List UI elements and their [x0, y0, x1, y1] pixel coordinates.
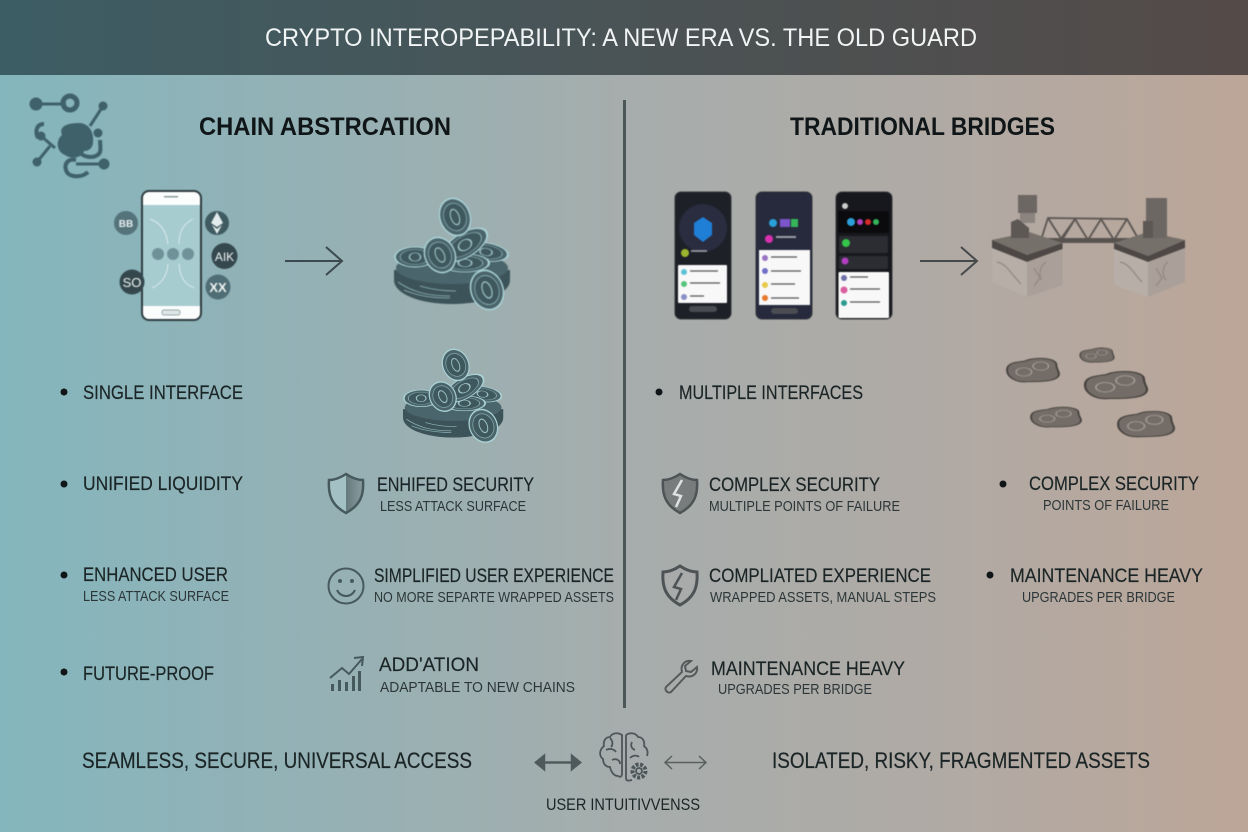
icon: coin stack — [394, 194, 510, 314]
arrow: to unified liquidity — [285, 247, 342, 275]
bullet list: LESS ATTACK SURFACE — [83, 588, 229, 605]
center divider — [623, 100, 626, 708]
icon: phone with chains — [114, 191, 238, 320]
item: complex security: MULTIPLE POINTS OF FAILURE — [709, 498, 900, 515]
benefit: adoption: ADAPTABLE TO NEW CHAINS — [380, 679, 575, 696]
arrow: solid double — [536, 756, 580, 769]
benefit: adoption: ADD'ATION — [379, 654, 479, 676]
title banner: CRYPTO INTEROPEPABILITY: A NEW ERA VS. THE OLD GUARD — [265, 24, 977, 52]
bullet: maintenance heavy — [986, 565, 1203, 606]
benefit: security: ENHIFED SECURITY — [377, 474, 534, 496]
benefit: security — [329, 474, 534, 515]
bullet: complex security — [1000, 473, 1199, 514]
item: maintenance heavy: UPGRADES PER BRIDGE — [718, 681, 872, 698]
icon: phone with chains: BB — [119, 219, 133, 230]
icon: small coin stack — [403, 346, 503, 446]
arrow: open double — [665, 756, 706, 769]
footer text: left: SEAMLESS, SECURE, UNIVERSAL ACCESS — [82, 748, 472, 773]
bullet: maintenance heavy: MAINTENANCE HEAVY — [1010, 565, 1203, 587]
panel: chain abstraction — [30, 96, 614, 696]
icon: phone with chains: SO — [123, 275, 141, 290]
bullet list — [60, 382, 243, 685]
phone 2 — [756, 192, 812, 319]
icon: broken bridge — [992, 195, 1185, 297]
benefit: user experience — [328, 565, 614, 606]
icon: brain with gear — [600, 733, 648, 781]
item: complex security — [663, 474, 900, 515]
item: maintenance heavy — [665, 658, 905, 698]
caption: user intuitiveness: USER INTUITIVVENSS — [546, 795, 700, 814]
item: complicated experience: WRAPPED ASSETS, MANUAL STEPS — [710, 589, 936, 606]
bullet list: FUTURE-PROOF — [83, 663, 214, 685]
icon: three phones — [675, 192, 892, 319]
icon: phone with chains: AIK — [215, 250, 234, 264]
bullet list: SINGLE INTERFACE — [83, 382, 243, 404]
bullet: complex security: COMPLEX SECURITY — [1029, 473, 1199, 495]
arrow: to bridge — [920, 247, 977, 275]
benefit: adoption — [330, 654, 575, 696]
phone 3 — [836, 192, 892, 319]
item: complicated experience — [663, 565, 936, 606]
heading: traditional bridges: TRADITIONAL BRIDGES — [790, 113, 1055, 141]
benefit: security: LESS ATTACK SURFACE — [380, 498, 526, 515]
icon: liquidity puddles — [1007, 348, 1174, 437]
footer text: right: ISOLATED, RISKY, FRAGMENTED ASSETS — [772, 748, 1150, 773]
icon: chain network — [30, 96, 109, 176]
benefit: user experience: NO MORE SEPARTE WRAPPED ASSETS — [374, 589, 614, 606]
item: complicated experience: COMPLIATED EXPERIENCE — [709, 565, 931, 587]
panel: traditional bridges — [656, 113, 1203, 698]
heading: chain abstraction: CHAIN ABSTRCATION — [199, 113, 451, 141]
item: maintenance heavy: MAINTENANCE HEAVY — [711, 658, 905, 680]
item: complex security: COMPLEX SECURITY — [709, 474, 880, 496]
bullet: maintenance heavy: UPGRADES PER BRIDGE — [1022, 589, 1175, 606]
footer comparison — [82, 733, 1150, 814]
title banner — [0, 0, 1248, 75]
bullet: complex security: POINTS OF FAILURE — [1043, 497, 1169, 514]
benefit: user experience: SIMPLIFIED USER EXPERIENCE — [374, 565, 614, 587]
phone 1 — [675, 192, 731, 319]
bullet list: UNIFIED LIQUIDITY — [83, 473, 243, 495]
bullet list: ENHANCED USER — [83, 564, 228, 586]
bullet: multiple interfaces: MULTIPLE INTERFACES — [679, 382, 863, 404]
icon: phone with chains: XX — [209, 280, 227, 295]
